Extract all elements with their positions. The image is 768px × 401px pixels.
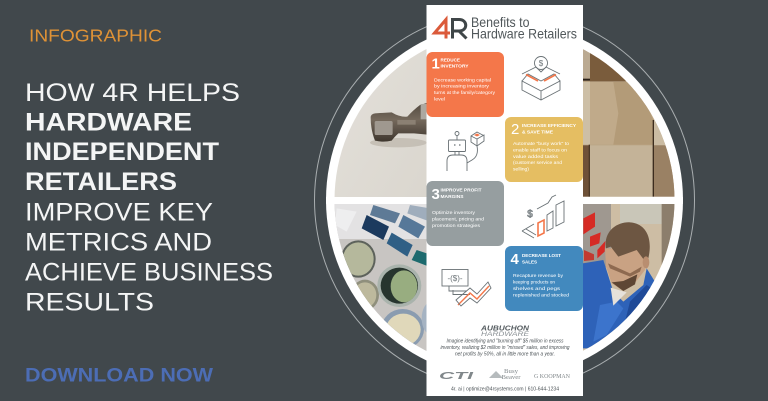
card 3: improve profit margins: placement, pricing and bbox=[432, 216, 484, 222]
poster title bbox=[471, 14, 577, 42]
headline: RETAILERS bbox=[25, 168, 177, 196]
poster footer contact: 4r. ai | optimize@4rsystems.com | 610-644-1234 bbox=[451, 386, 559, 392]
card 1: reduce inventory: REDUCE bbox=[440, 58, 460, 63]
left text column bbox=[25, 26, 273, 386]
logo: Aubuchon Hardware: HARDWARE bbox=[481, 331, 530, 338]
logo: Aubuchon Hardware: AUBUCHON bbox=[480, 326, 530, 332]
card 2: increase efficiency: enable staff to focus on bbox=[513, 148, 568, 152]
icon: rising bars bbox=[522, 195, 564, 238]
poster sheet bbox=[426, 5, 583, 396]
card 1: reduce inventory: by increasing inventory bbox=[434, 84, 490, 88]
card 4: decrease lost sales: DECREASE LOST bbox=[522, 253, 561, 258]
card 2: increase efficiency bbox=[505, 117, 583, 182]
headline: IMPROVE KEY bbox=[25, 198, 213, 226]
logo: Aubuchon Hardware bbox=[480, 326, 530, 338]
partner logos: Beaver bbox=[502, 375, 520, 381]
card 4: decrease lost sales: keeping products on bbox=[513, 280, 555, 284]
card 2: increase efficiency: (customer service and bbox=[513, 160, 562, 165]
thin outer ring bbox=[314, 10, 694, 390]
poster title: Hardware Retailers bbox=[471, 26, 577, 42]
headline: ACHIEVE BUSINESS bbox=[25, 258, 273, 286]
headline: METRICS AND bbox=[25, 228, 212, 256]
card 2: increase efficiency: selling) bbox=[513, 166, 530, 172]
icon: robot holding cube bbox=[447, 132, 484, 171]
headline bbox=[25, 79, 273, 316]
card 2: increase efficiency: 2 bbox=[511, 121, 519, 138]
card 1: reduce inventory: 1 bbox=[432, 56, 440, 72]
card 4: decrease lost sales: replenished and stocked bbox=[513, 292, 569, 298]
icon: open box with coin bbox=[522, 56, 560, 100]
aubuchon testimonial bbox=[440, 326, 570, 358]
partner logos: CTI bbox=[439, 371, 473, 382]
card 2: increase efficiency: & SAVE TIME bbox=[522, 129, 553, 134]
card 2: increase efficiency: value added tasks bbox=[513, 154, 559, 159]
partner logos: Busy bbox=[504, 369, 518, 375]
card 4: decrease lost sales: Recapture revenue by bbox=[513, 273, 564, 278]
icon: rising bars: $ bbox=[527, 209, 533, 220]
card 1: reduce inventory: INVENTORY bbox=[440, 64, 468, 69]
testimonial copy: Imagine identifying and "burning off" $5 million in excess bbox=[446, 338, 564, 344]
photo divider bbox=[326, 197, 684, 204]
photo: wood blocks bbox=[583, 49, 674, 197]
card 3: improve profit margins bbox=[426, 181, 504, 246]
poster bbox=[426, 5, 583, 396]
card 1: reduce inventory bbox=[426, 52, 504, 117]
card 1: reduce inventory: level bbox=[434, 96, 445, 102]
icon: open box with coin: $ bbox=[539, 59, 544, 68]
card 4: decrease lost sales: shelves and pegs bbox=[513, 286, 561, 291]
card 3: improve profit margins: 3 bbox=[432, 186, 440, 203]
card 3: improve profit margins: MARGINS bbox=[440, 194, 464, 199]
photo collage bbox=[334, 49, 674, 351]
card 4: decrease lost sales: 4 bbox=[510, 251, 520, 268]
photo: retail worker bbox=[583, 204, 674, 351]
testimonial copy bbox=[440, 338, 570, 358]
photo: hammer bbox=[334, 49, 426, 197]
headline: HOW 4R HELPS bbox=[25, 79, 240, 107]
card 1: reduce inventory: turns at the family/category bbox=[434, 90, 496, 95]
partner logos: G KOOPMAN bbox=[534, 373, 570, 380]
card 2: increase efficiency: INCREASE EFFICIENCY bbox=[522, 123, 576, 128]
partner logos bbox=[439, 369, 570, 382]
card 1: reduce inventory: Decrease working capital bbox=[434, 78, 491, 82]
icon: money and trend arrow bbox=[442, 270, 491, 306]
poster header bbox=[434, 14, 577, 42]
headline: HARDWARE bbox=[25, 108, 192, 136]
testimonial copy: inventory, realizing $2 million in "missed" sales, and improving bbox=[440, 345, 570, 351]
card 3: improve profit margins: Optimize inventory bbox=[432, 210, 476, 215]
icon: money and trend arrow: -($)- bbox=[447, 274, 463, 283]
card 4: decrease lost sales bbox=[505, 246, 583, 311]
photo: paint cans bbox=[334, 204, 426, 351]
card 3: improve profit margins: promotion strategies bbox=[432, 223, 481, 228]
card 2: increase efficiency: Automate "busy work" to bbox=[513, 141, 569, 146]
label: infographic: INFOGRAPHIC bbox=[29, 26, 162, 46]
poster title: Benefits to bbox=[471, 14, 530, 30]
card 3: improve profit margins: IMPROVE PROFIT bbox=[440, 188, 482, 192]
card 4: decrease lost sales: SALES bbox=[522, 260, 537, 264]
logo: 4R bbox=[434, 20, 466, 38]
headline: INDEPENDENT bbox=[25, 138, 219, 166]
call to action: DOWNLOAD NOW bbox=[25, 364, 214, 386]
white circle bbox=[326, 22, 683, 378]
testimonial copy: net profits by 50%, all in little more than a year. bbox=[455, 352, 555, 358]
headline: RESULTS bbox=[25, 288, 154, 316]
